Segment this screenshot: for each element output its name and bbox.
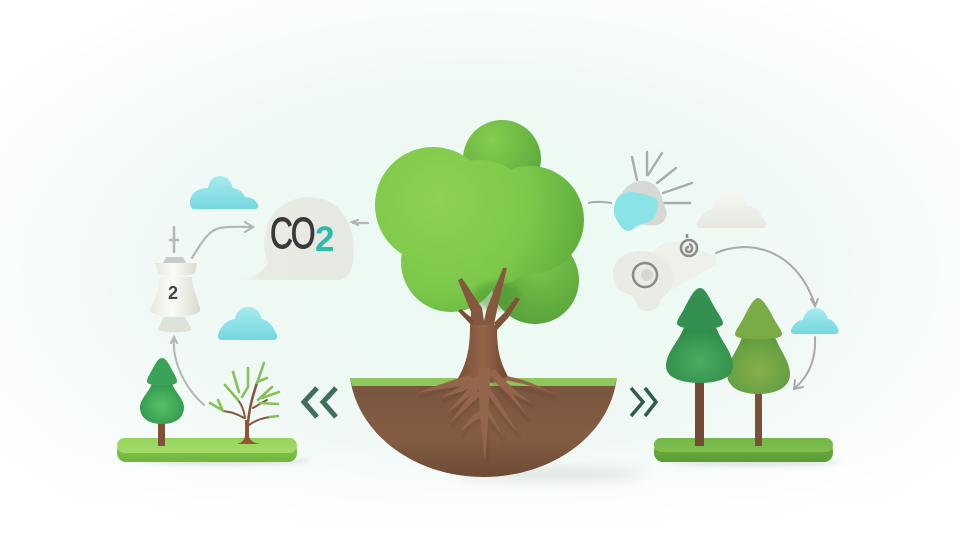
right chevrons <box>631 388 656 416</box>
arrow: vertical tick <box>170 227 178 252</box>
ribbon <box>650 242 716 291</box>
bare sapling <box>210 363 279 444</box>
light conifer <box>727 298 790 446</box>
white vase tower <box>150 257 200 332</box>
arrow to sun <box>588 202 612 203</box>
left platform with trees <box>117 358 297 462</box>
right platform with trees <box>654 288 833 462</box>
sun body <box>620 181 667 225</box>
ground shadows <box>140 458 840 479</box>
left chevrons <box>304 388 336 417</box>
soil bowl <box>350 378 617 477</box>
central tree on soil bowl <box>350 120 617 477</box>
cyan cloud right <box>791 308 839 334</box>
small swirl icon <box>681 234 697 256</box>
arc arrow: cloud to trees <box>794 337 815 389</box>
vase label: 2 <box>168 283 178 303</box>
trunk and branches <box>457 268 520 383</box>
cyan cloud lower left <box>218 307 277 340</box>
arrow: crown to CO2 <box>352 220 368 225</box>
arrows right <box>716 247 818 389</box>
conifer tree <box>140 358 184 446</box>
subscript 2: 2 <box>315 220 334 259</box>
arrow: sapling to vase <box>171 337 204 405</box>
cyan cloud upper left <box>190 176 258 209</box>
cloud body <box>613 251 673 311</box>
sun rays <box>632 152 692 203</box>
sun with rays <box>588 152 692 231</box>
tree crown <box>375 120 584 324</box>
roots <box>417 368 555 460</box>
cyan cover <box>614 192 658 231</box>
ring icon <box>633 263 657 287</box>
right platform <box>654 438 833 462</box>
root fills <box>417 368 553 460</box>
swirl cloud device <box>613 234 716 311</box>
dark conifer <box>666 288 733 446</box>
CO2 bubble <box>240 197 354 280</box>
arrows left <box>170 220 368 405</box>
arc arrow: swirl to cloud <box>716 247 818 306</box>
root shadows <box>420 372 555 460</box>
left platform <box>117 438 297 462</box>
white cloud <box>697 192 766 228</box>
CO2 label: CO <box>270 209 316 258</box>
arrow: vase to CO2 <box>192 222 253 258</box>
